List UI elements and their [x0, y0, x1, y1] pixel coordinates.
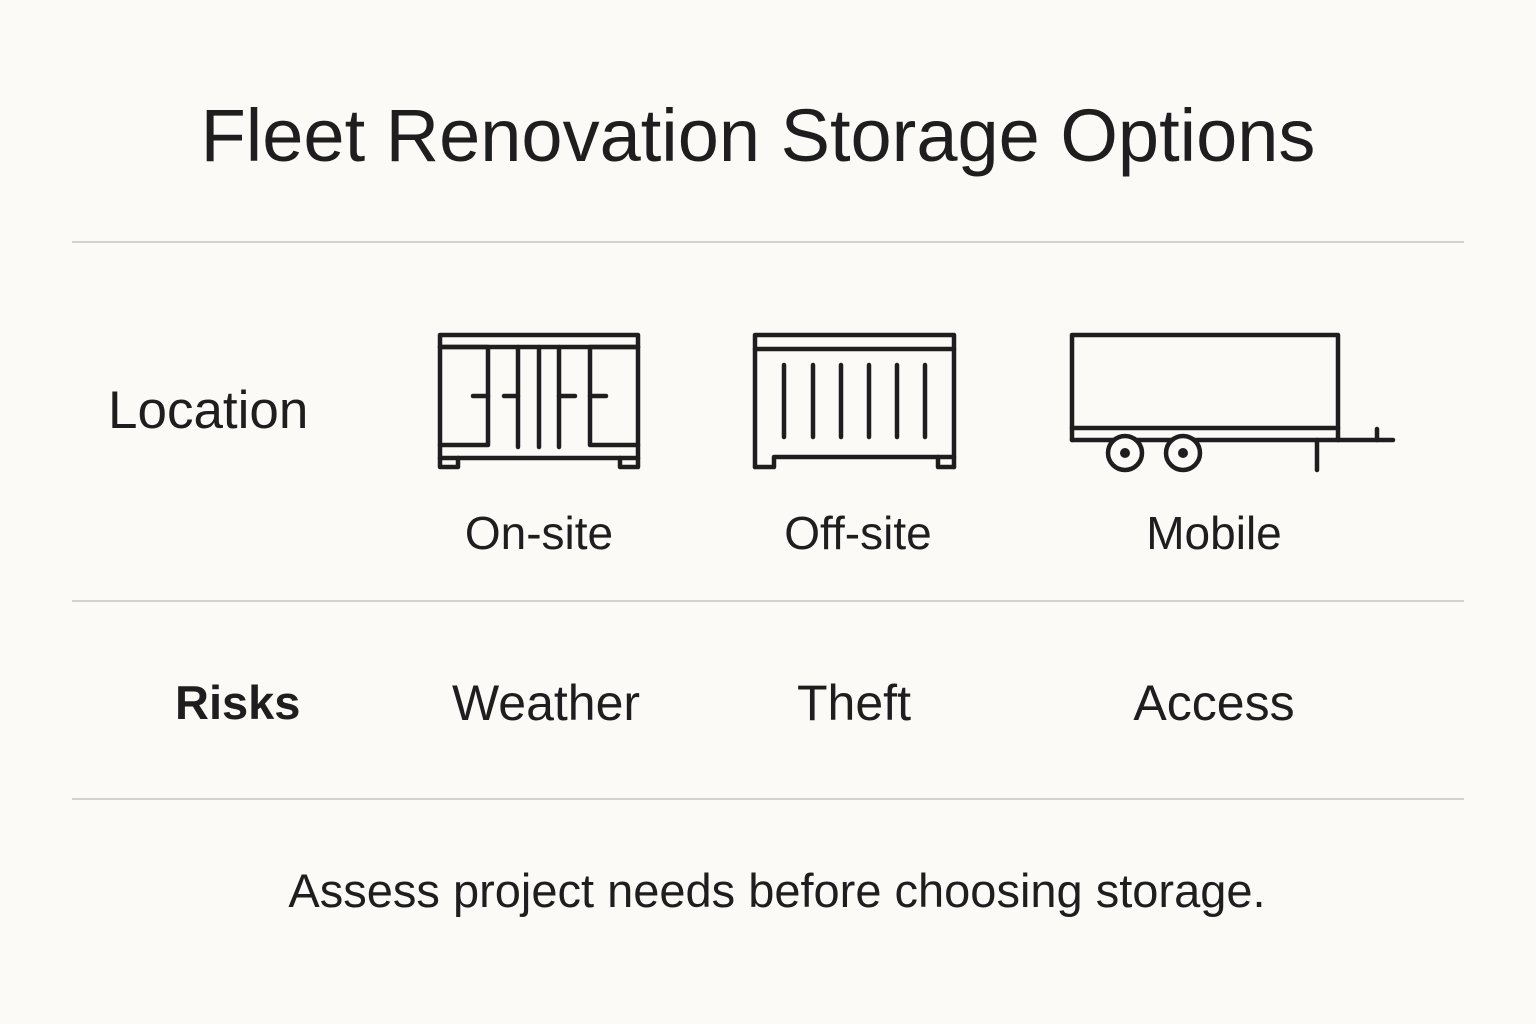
row label: Risks: Risks: [175, 676, 300, 729]
title: Fleet Renovation Storage Options: [201, 94, 1315, 177]
icon: on-site container: [440, 335, 638, 467]
row label: Location: Location: [108, 381, 308, 440]
icon: off-site container: [755, 335, 954, 467]
label: Mobile: Mobile: [1146, 507, 1282, 559]
risk: Weather: Weather: [452, 675, 640, 731]
risk: Theft: Theft: [797, 675, 911, 731]
footer note: Assess project needs before choosing storage.: [288, 864, 1266, 917]
label: On-site: On-site: [465, 507, 613, 559]
label: Off-site: Off-site: [784, 507, 932, 559]
risk: Access: Access: [1133, 675, 1295, 731]
icon: trailer: [1072, 335, 1393, 470]
